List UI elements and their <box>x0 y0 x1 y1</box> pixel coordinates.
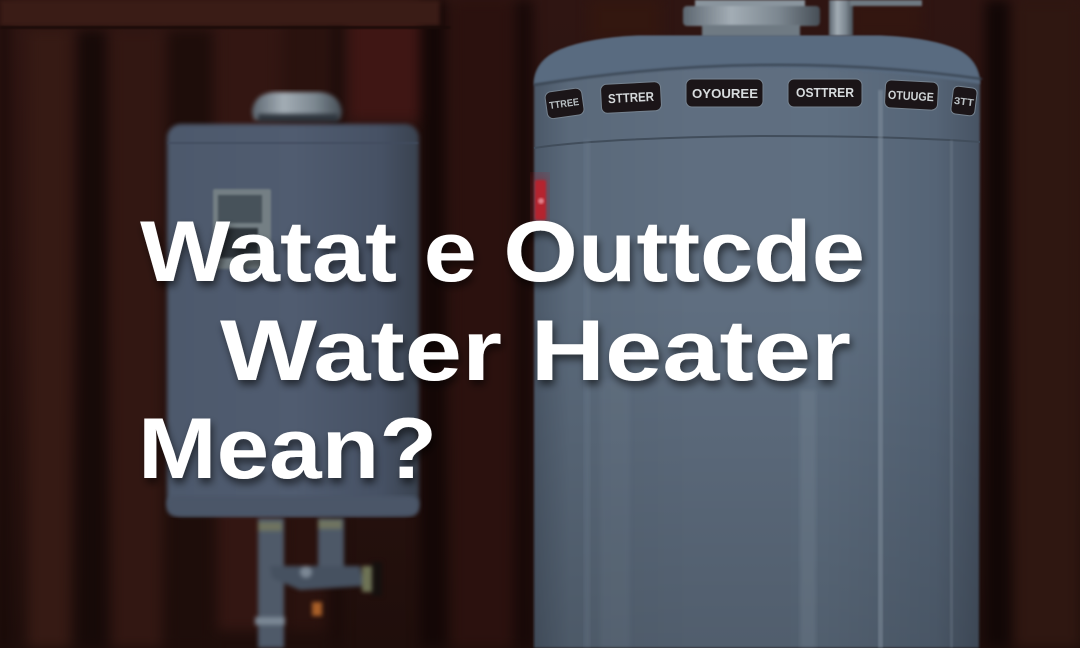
title <box>138 204 865 497</box>
title: Watat e Outtcde <box>140 204 865 300</box>
red indicator light <box>530 172 550 228</box>
badge 4: OSTTRER <box>796 85 855 100</box>
flue and top fittings <box>683 0 922 37</box>
control panel <box>213 189 271 269</box>
badge 6 <box>950 86 978 116</box>
cabinet body <box>167 124 419 516</box>
badge 1: TTREE <box>549 97 580 112</box>
badge 1 <box>544 87 585 119</box>
label badges <box>544 79 978 119</box>
badge 2 <box>600 81 662 114</box>
title: Mean? <box>138 401 437 497</box>
tank body <box>534 36 980 648</box>
vent cap <box>252 92 342 122</box>
badge 2: STTRER <box>608 89 655 106</box>
small water heater <box>167 92 419 516</box>
large tank <box>530 0 982 648</box>
badge 6: 3TT <box>953 96 974 109</box>
badge 5: OTUUGE <box>888 88 934 104</box>
badge 5 <box>884 80 939 110</box>
badge 3 <box>686 79 763 107</box>
badge 3: OYOUREE <box>692 86 758 101</box>
badge 4 <box>788 79 862 107</box>
title: Water Heater <box>220 303 851 399</box>
pipes below small heater <box>255 518 382 648</box>
